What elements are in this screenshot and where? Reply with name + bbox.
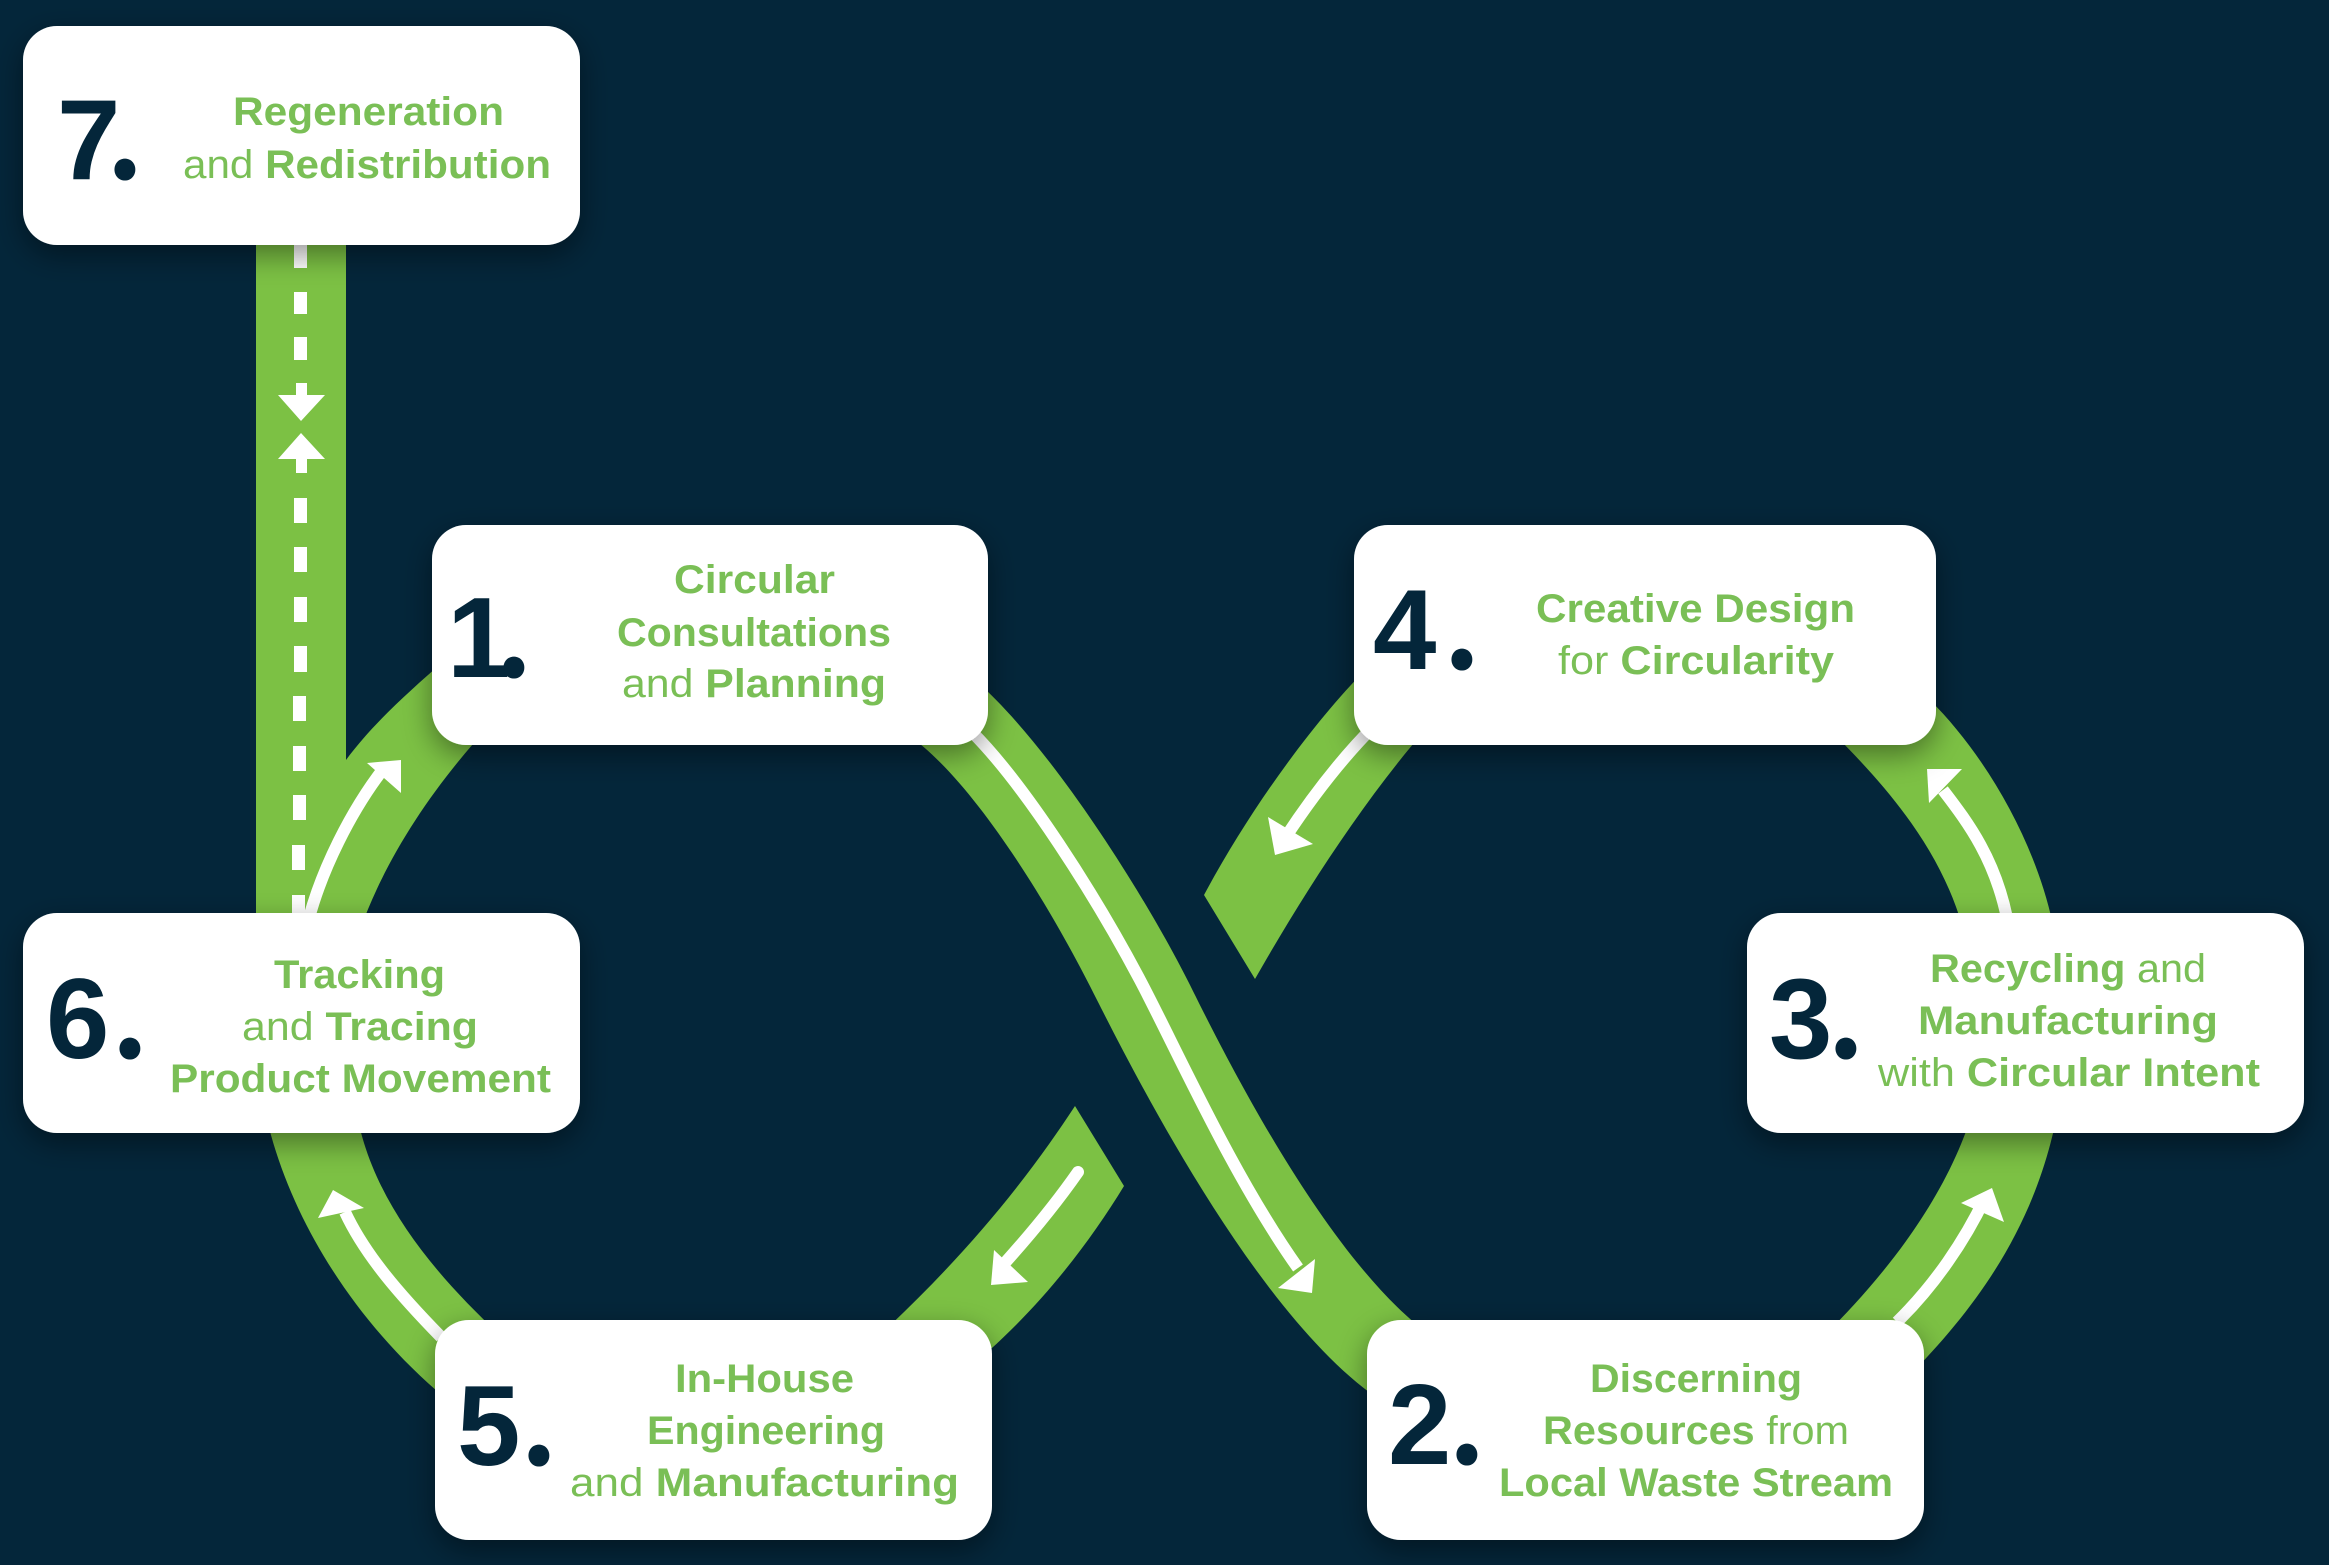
label: creative design bbox=[1536, 587, 1855, 683]
dashed line: lower bbox=[292, 498, 307, 920]
box: step 3 bbox=[1747, 913, 2304, 1133]
label: circular consultations bbox=[617, 558, 891, 706]
label: discerning resources: Resources from bbox=[1543, 1409, 1849, 1453]
label: recycling and manufacturing: Recycling and bbox=[1930, 947, 2206, 991]
label: tracking and tracing: Tracking bbox=[274, 953, 445, 997]
label: tracking and tracing: and Tracing bbox=[242, 1005, 478, 1049]
label: circular consultations: Consultations bbox=[617, 611, 891, 655]
arrow: step 6 to step 1 bbox=[309, 760, 401, 918]
box: step 4 bbox=[1354, 525, 1936, 745]
band: step 2 to step 3 bbox=[1825, 1120, 2056, 1380]
dashed line: upper bbox=[294, 240, 307, 360]
band: tapered start to step 5 bbox=[880, 1106, 1124, 1375]
box: step 2 bbox=[1367, 1320, 1924, 1540]
label: recycling and manufacturing bbox=[1877, 947, 2260, 1095]
label: creative design: for Circularity bbox=[1558, 639, 1835, 683]
band: step 4 tapered end bbox=[1204, 665, 1425, 979]
number 1: 1. bbox=[447, 545, 532, 710]
label: creative design: Creative Design bbox=[1536, 587, 1855, 631]
arrow: up toward step 7 bbox=[278, 433, 325, 473]
label: tracking and tracing: Product Movement bbox=[170, 1057, 551, 1101]
box: step 1 bbox=[432, 525, 988, 745]
number 3: 3. bbox=[1769, 926, 1864, 1091]
label: regeneration: Regeneration bbox=[233, 90, 504, 134]
band: step 1 to step 2 S-curve bbox=[905, 680, 1430, 1400]
band: step 3 to step 4 bbox=[1835, 700, 2053, 925]
number 7: 7. bbox=[57, 47, 143, 212]
label: in-house engineering bbox=[570, 1357, 959, 1505]
label: circular consultations: Circular bbox=[674, 558, 835, 602]
label: in-house engineering: Engineering bbox=[647, 1409, 885, 1453]
box: step 7 bbox=[23, 26, 580, 245]
number 6: 6. bbox=[46, 926, 148, 1091]
band: step 5 to step 6 bbox=[267, 1120, 500, 1410]
label: discerning resources: Discerning bbox=[1590, 1357, 1802, 1401]
label: in-house engineering: and Manufacturing bbox=[570, 1461, 959, 1505]
label: in-house engineering: In-House bbox=[675, 1357, 854, 1401]
label: regeneration: and Redistribution bbox=[183, 143, 551, 187]
box: step 5 bbox=[435, 1320, 992, 1540]
number 4: 4. bbox=[1373, 537, 1480, 702]
label: recycling and manufacturing: with Circular Intent bbox=[1877, 1051, 2260, 1095]
label: discerning resources: Local Waste Stream bbox=[1499, 1461, 1893, 1505]
label: recycling and manufacturing: Manufacturing bbox=[1918, 999, 2218, 1043]
vertical band with dashed line and opposing arrows between step 7 and step 6 bbox=[256, 240, 490, 930]
label: regeneration bbox=[183, 90, 551, 187]
label: circular consultations: and Planning bbox=[622, 662, 886, 706]
box: step 6 bbox=[23, 913, 580, 1133]
label: tracking and tracing bbox=[170, 953, 551, 1101]
label: discerning resources bbox=[1499, 1357, 1893, 1505]
number 5: 5. bbox=[457, 1333, 557, 1498]
number 2: 2. bbox=[1388, 1332, 1485, 1497]
arrow: down toward regeneration loop bbox=[278, 383, 325, 421]
